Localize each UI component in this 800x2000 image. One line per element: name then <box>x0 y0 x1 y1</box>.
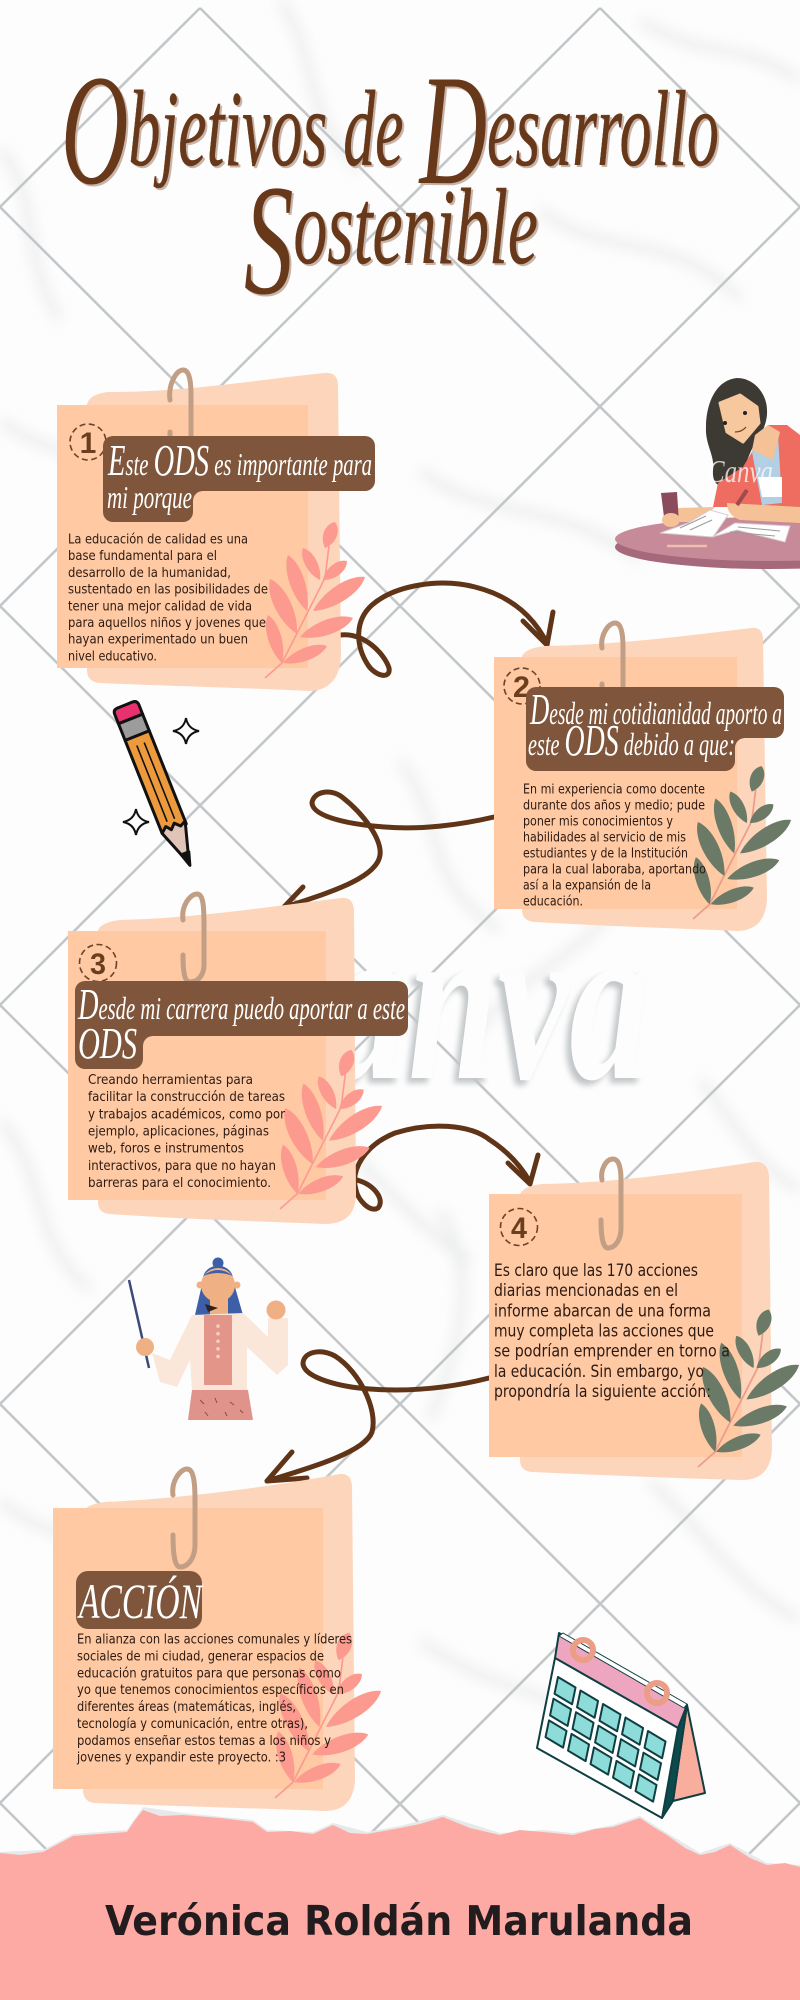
text: card 4 body: se podrían emprender en torno a <box>494 1342 730 1361</box>
text: card 4 body: Es claro que las 170 acciones <box>494 1261 698 1280</box>
table <box>615 517 800 569</box>
text: card 2 body: así a la expansión de la <box>523 879 651 894</box>
text: card 1 body <box>68 532 268 664</box>
icon: pink leaf 5 <box>275 1633 381 1798</box>
text: card 3 body: y trabajos académicos, como por <box>88 1106 285 1122</box>
text: action body <box>76 1632 352 1766</box>
title: D <box>418 43 487 218</box>
icon: paper clip 5 <box>173 1469 195 1567</box>
text: action body: diferentes áreas (matemáticas, inglés, <box>77 1699 296 1715</box>
title <box>61 43 719 328</box>
icon: number 1 <box>70 424 106 460</box>
text: action body: educación gratuitos para que personas como <box>77 1665 341 1681</box>
arrow: card 3 to card 4 <box>355 1126 538 1209</box>
panel: card 4 <box>489 1159 799 1480</box>
text: card 3 body: facilitar la construcción de tareas <box>88 1089 285 1105</box>
arrow: card 2 to card 3 <box>283 792 494 908</box>
text: card 3 body: Creando herramientas para <box>88 1072 253 1088</box>
title: ostenible <box>294 168 538 287</box>
title: S <box>244 153 294 328</box>
text: card 2 body: para la cual laboraba, aportando <box>523 863 706 878</box>
heading: card 1: Este ODS es importante para <box>107 436 372 485</box>
text: action body: jovenes y expandir este proyecto. :3 <box>76 1751 286 1766</box>
icon: number 4 <box>500 1208 538 1246</box>
panel: card 1 <box>57 370 375 691</box>
text: card 3 body: barreras para el conocimiento. <box>88 1175 271 1191</box>
text: card 2 body: educación. <box>523 895 583 910</box>
text: card 1 body: hayan experimentado un buen <box>68 633 248 648</box>
title: O <box>61 43 129 218</box>
text: card 1 body: sustentado en las posibilidades de <box>68 583 268 598</box>
icon: sparkle <box>173 718 199 744</box>
text: card 3 body: web, foros e instrumentos <box>88 1141 244 1157</box>
text: card 2 body: habilidades al servicio de mis <box>523 831 686 846</box>
arrow: card 4 to action card <box>267 1352 489 1481</box>
text: action body: sociales de mi ciudad, generar espacios de <box>77 1650 324 1664</box>
text: card 2 body <box>523 783 706 910</box>
icon: pencil with sparkles <box>113 700 201 871</box>
icon: number 2 <box>504 668 540 704</box>
panel: card 2 <box>494 623 791 931</box>
text: action body: En alianza con las acciones comunales y líderes <box>77 1632 352 1648</box>
icon: pink leaf 1 <box>265 522 365 678</box>
text: action body: yo que tenemos conocimientos específicos en <box>77 1682 344 1698</box>
text: card 3 body: ejemplo, aplicaciones, páginas <box>88 1124 269 1140</box>
icon: paper clip 2 <box>602 623 623 694</box>
title: bjetivos de <box>129 70 420 189</box>
panel: action card <box>53 1469 381 1811</box>
heading: card 3: Desde mi carrera puedo aportar a este <box>77 980 405 1029</box>
heading: card 3: ODS <box>78 1019 137 1068</box>
icon: number 1: 1 <box>80 427 96 460</box>
text: card 2 body: En mi experiencia como docente <box>523 783 705 798</box>
text: card 4 body <box>494 1261 730 1401</box>
text: card 4 body: la educación. Sin embargo, yo <box>494 1362 704 1381</box>
icon: woman studying at table: Canva <box>708 453 773 489</box>
icon: paper clip 3 <box>183 894 204 982</box>
calendar day grid <box>546 1677 666 1802</box>
icon: pink leaf 3 <box>280 1050 382 1209</box>
panel: card 3 <box>68 894 408 1224</box>
heading: card 3 <box>75 980 408 1069</box>
heading: action <box>76 1571 204 1629</box>
icon: teacher with pointer <box>129 1258 288 1420</box>
text: card 1 body: tener una mejor calidad de vida <box>68 599 252 614</box>
icon: number 3: 3 <box>90 948 106 981</box>
icon: woman studying at table <box>615 378 800 569</box>
calendar rings <box>573 1640 667 1703</box>
text: card 4 body: informe abarcan de una forma <box>494 1301 711 1320</box>
text: card 3 body: interactivos, para que no hayan <box>88 1158 276 1174</box>
heading: card 1 <box>103 436 375 522</box>
text: card 4 body: muy completa las acciones que <box>494 1322 714 1340</box>
text: card 4 body: diarias mencionadas en el <box>494 1281 678 1300</box>
icon: paper clip 1 <box>170 370 191 445</box>
text: card 3 body <box>88 1072 285 1191</box>
icon: sparkle small <box>123 809 149 835</box>
text: action body: tecnología y comunicación, entre otras), <box>77 1716 308 1732</box>
text: card 2 body: poner mis conocimientos y <box>523 815 673 830</box>
arrow: card 1 to card 2 <box>340 583 553 675</box>
text: action body: podamos enseñar estos temas a los niños y <box>77 1734 331 1749</box>
icon: number 4: 4 <box>511 1212 527 1245</box>
text: card 4 body: propondría la siguiente acción: <box>494 1382 711 1401</box>
icon: paper clip 4 <box>601 1159 621 1248</box>
icon: green leaf 2 <box>693 766 791 919</box>
footer name: Verónica Roldán Marulanda <box>105 1897 693 1945</box>
text: card 2 body: durante dos años y medio; pude <box>523 799 705 814</box>
icon: number 3 <box>80 944 116 982</box>
text: card 2 body: estudiantes y de la Institución <box>523 847 688 862</box>
icon: number 2: 2 <box>513 671 530 704</box>
text: card 1 body: desarrollo de la humanidad, <box>68 566 231 581</box>
heading: card 1: mi porque <box>107 479 192 515</box>
icon: green leaf 4 <box>698 1309 799 1467</box>
heading: action: ACCIÓN <box>77 1573 204 1629</box>
text: card 1 body: La educación de calidad es una <box>68 532 248 548</box>
footer: torn paper band <box>0 1807 800 2000</box>
heading: card 2: este ODS debido a que: <box>528 716 735 765</box>
icon: desk calendar <box>537 1633 705 1818</box>
text: card 1 body: para aquellos niños y jovenes que <box>68 616 266 631</box>
text: card 1 body: base fundamental para el <box>68 549 217 564</box>
text: card 1 body: nivel educativo. <box>68 649 157 664</box>
heading: card 2 <box>526 685 784 771</box>
